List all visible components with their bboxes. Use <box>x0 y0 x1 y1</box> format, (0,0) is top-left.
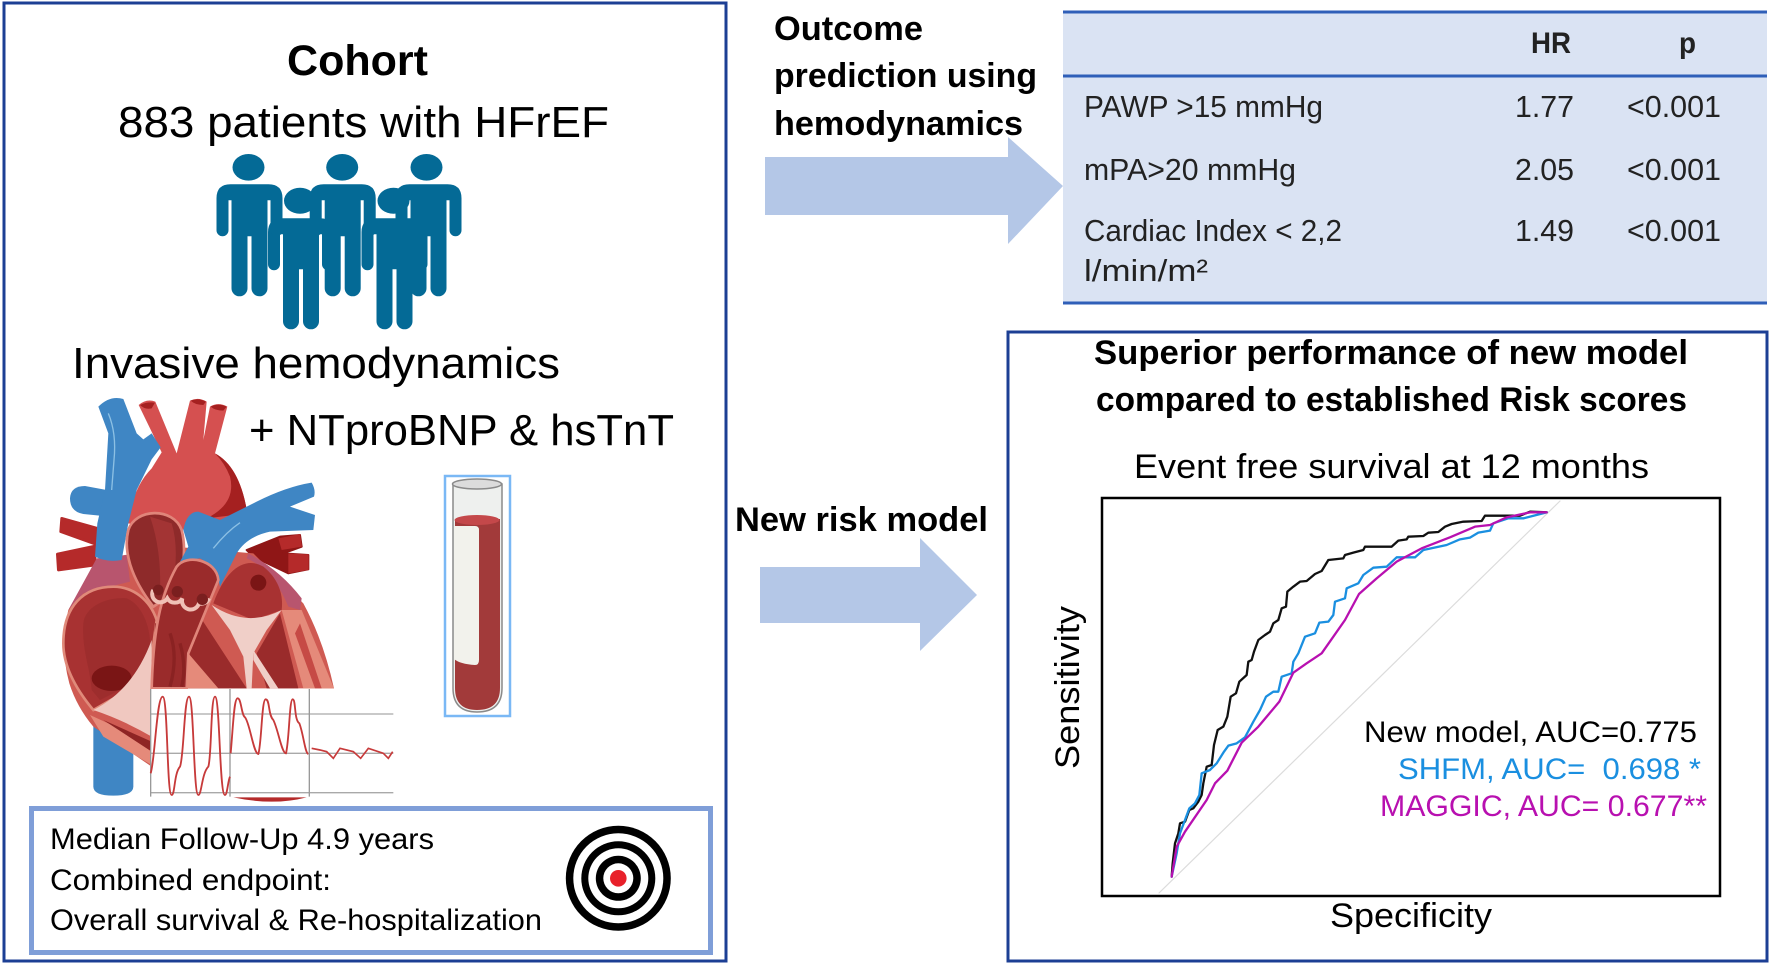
heading: outcome prediction using hemodynamics: Outcome <box>774 10 923 48</box>
heading: outcome prediction using hemodynamics <box>774 10 1037 143</box>
row: cardiac index <box>1084 213 1721 288</box>
arrow: to model performance <box>760 538 977 651</box>
follow-up box frame <box>32 808 710 952</box>
row: cardiac index: <0.001 <box>1627 213 1721 248</box>
text: median follow-up: Median Follow-Up 4.9 years <box>50 823 434 856</box>
heading: Cohort: Cohort <box>287 37 428 85</box>
row: PAWP: <0.001 <box>1627 89 1721 124</box>
reference diagonal <box>1159 501 1560 893</box>
axis label: sensitivity: Sensitivity <box>1049 606 1087 769</box>
curve: MAGGIC <box>1172 512 1547 877</box>
panel: cohort <box>4 3 726 961</box>
icon: anatomical heart <box>57 398 334 802</box>
performance panel frame <box>1008 332 1767 961</box>
icon: target <box>566 826 671 931</box>
row: mPA: <0.001 <box>1627 152 1721 187</box>
row: cardiac index: 1.49 <box>1515 213 1574 248</box>
arrow: to hemodynamics table <box>765 137 1063 244</box>
cohort panel frame <box>4 3 726 961</box>
legend: AUC values: MAGGIC, AUC= 0.677** <box>1380 790 1707 823</box>
text: biomarkers: + NTproBNP & hsTnT <box>249 406 674 455</box>
row: cardiac index: Cardiac Index < 2,2 <box>1084 213 1342 248</box>
table header: HR <box>1531 27 1571 60</box>
heading: outcome prediction using hemodynamics: prediction using <box>774 57 1037 95</box>
row: PAWP <box>1084 89 1721 124</box>
text: chart subtitle: Event free survival at 12 months <box>1134 448 1649 486</box>
heading: outcome prediction using hemodynamics: hemodynamics <box>774 105 1023 143</box>
row: mPA <box>1084 152 1721 187</box>
chart: pressure waveforms <box>151 689 393 797</box>
text: endpoint components: Overall survival & Re-hospitalization <box>50 904 542 937</box>
table: hazard ratios <box>1063 12 1767 303</box>
icon: group of people <box>216 154 462 329</box>
axis label: specificity: Specificity <box>1330 897 1492 935</box>
row: PAWP: PAWP >15 mmHg <box>1084 89 1323 124</box>
legend: AUC values <box>1364 716 1707 823</box>
curve: SHFM <box>1172 512 1547 877</box>
curve: new model <box>1172 512 1547 877</box>
heading: superior performance: Superior performance of new model <box>1094 334 1688 372</box>
text: combined endpoint: Combined endpoint: <box>50 864 331 897</box>
plot frame <box>1102 498 1720 896</box>
panel: follow-up and endpoint <box>32 808 710 952</box>
heading: new risk model: New risk model <box>735 501 988 539</box>
row: PAWP: 1.77 <box>1515 89 1574 124</box>
row: cardiac index: l/min/m² <box>1084 253 1208 288</box>
table header <box>1531 27 1696 60</box>
row: mPA: mPA>20 mmHg <box>1084 152 1296 187</box>
legend: AUC values: SHFM, AUC= 0.698 * <box>1398 753 1701 786</box>
text: patient count: 883 patients with HFrEF <box>118 98 609 147</box>
heading: superior performance <box>1094 334 1688 419</box>
legend: AUC values: New model, AUC=0.775 <box>1364 716 1697 749</box>
panel: model performance <box>1008 332 1767 961</box>
text: invasive hemodynamics: Invasive hemodynamics <box>72 339 560 388</box>
heading: superior performance: compared to established Risk scores <box>1096 381 1687 419</box>
chart: ROC curves <box>1102 498 1720 896</box>
icon: blood test tube <box>445 476 510 716</box>
table header: p <box>1679 27 1696 60</box>
row: mPA: 2.05 <box>1515 152 1574 187</box>
